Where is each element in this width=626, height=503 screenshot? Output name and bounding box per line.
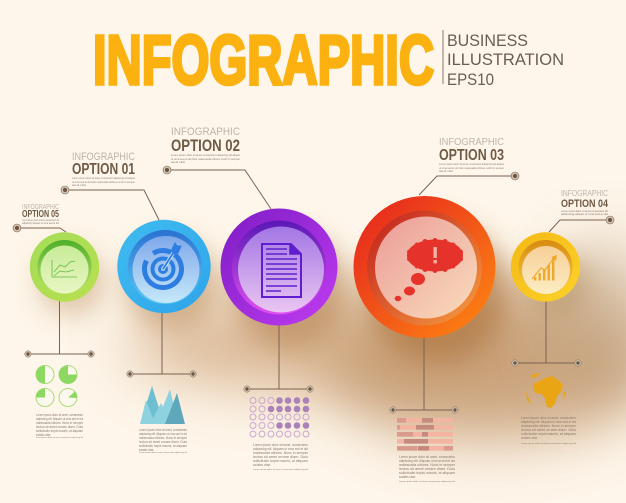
label: option 01: Lorem ipsum dolor sit amet consectetur adipiscing elit aliquet [72, 176, 135, 180]
text block: yellow: sollicitudin turpis mauris, at aliquam [521, 431, 577, 436]
text block: green: Lorem ipsum dolor sit amet, consectetur [36, 412, 83, 417]
text block: blue: lectus sit amet ornare diam. Duis [139, 439, 187, 444]
label: option 01: INFOGRAPHIC [72, 151, 135, 163]
text block: yellow: sodales vitae. [521, 435, 538, 440]
circle: green option 05 [30, 232, 99, 302]
text block: red: sollicitudin turpis mauris, at aliquam [399, 470, 456, 475]
label: option 03: Lorem ipsum dolor sit amet consectetur adipiscing elit aliquet [439, 162, 504, 166]
label: option 01 [72, 151, 135, 187]
text block: purple: lectus sit amet ornare diam. Duis [253, 454, 308, 459]
text block: purple: sollicitudin turpis mauris, at aliquam [253, 458, 309, 463]
text block: red: malesuada ultrices. Nunc in semper [399, 462, 456, 467]
label: option 03: INFOGRAPHIC [439, 137, 504, 148]
text block: yellow: Lorem ipsum dolor sit amet, consectetur [521, 415, 577, 420]
label: option 03: ut urna sed et dui felis malesuada ultrices morbi in semper [439, 166, 504, 170]
text block: green: adipiscing elit. Aliquam ut urna sed et dui [36, 416, 83, 421]
circle: yellow option 04 [511, 232, 580, 302]
icon: document [262, 244, 301, 297]
circle: blue option 01 [117, 220, 211, 313]
text block: blue: sollicitudin turpis mauris, at aliquam [139, 443, 188, 448]
label: option 02: INFOGRAPHIC [171, 126, 240, 138]
text block: yellow: Lorem ipsum dolor sit amet consectetur adipiscing elit [521, 442, 577, 445]
label: option 04: adipiscing aliquet ut urna sed et dui [561, 212, 608, 216]
title: INFOGRAPHIC [93, 21, 434, 99]
text block: blue [139, 427, 188, 454]
icon: line chart [52, 260, 77, 277]
text block: purple: adipiscing elit. Aliquam ut urna sed et dui [253, 446, 308, 451]
label: option 04: INFOGRAPHIC [561, 189, 608, 198]
subtitle: business illustration: ILLUSTRATION [447, 50, 564, 69]
label: option 03: OPTION 03 [439, 147, 504, 164]
icon: globe [526, 373, 566, 408]
label: option 04: Lorem ipsum dolor sit amet consectetur elit [561, 209, 608, 213]
cast shadows [38, 222, 626, 440]
text block: green: sodales vitae. [36, 432, 51, 437]
label: option 05 [22, 204, 59, 225]
icon: growth chart [532, 255, 557, 280]
text block: purple: Lorem ipsum dolor sit amet, consectetur [253, 442, 309, 447]
label: option 05: Lorem ipsum dolor sit amet consectetur elit [22, 218, 59, 222]
label: option 04 [561, 189, 609, 216]
text block: blue: malesuada ultrices. Nunc in semper [139, 435, 187, 440]
label: option 03: sed dui [439, 169, 453, 173]
text block: purple: malesuada ultrices. Nunc in semper [253, 450, 309, 455]
text block: yellow: adipiscing elit. Aliquam ut urna sed et dui [521, 419, 576, 424]
text block: green [36, 412, 83, 439]
label: option 01: ut urna sed et dui felis malesuada ultrices morbi in semper [72, 180, 135, 184]
connectors [17, 170, 610, 410]
subtitle: business illustration: BUSINESS [447, 31, 528, 50]
icon: thought bubble with exclamation [395, 238, 463, 301]
text block: green: lectus sit amet ornare diam. Duis [36, 424, 83, 429]
label: option 02: sed dui [171, 160, 185, 164]
text block: blue: sodales vitae. [139, 447, 154, 452]
connector end dots [13, 166, 614, 413]
text block: red: lectus sit amet ornare diam. Duis [399, 466, 455, 471]
text block: green: malesuada ultrices. Nunc in semper [36, 420, 83, 425]
text block: purple [253, 442, 309, 471]
label: option 05: adipiscing aliquet ut urna sed et dui [22, 221, 59, 225]
text block: blue: adipiscing elit. Aliquam ut urna sed et dui [139, 431, 187, 436]
text block: red: Lorem ipsum dolor sit amet, consectetur [399, 454, 456, 459]
label: option 05: OPTION 05 [22, 209, 59, 220]
icon: target with dart [138, 243, 188, 294]
circle: red option 03 [354, 196, 496, 338]
label: option 02 [171, 126, 240, 164]
text block: purple: sodales vitae. [253, 462, 271, 467]
subtitle: business illustration: EPS10 [447, 70, 494, 89]
label: option 05: INFOGRAPHIC [22, 204, 59, 211]
text block: purple: Lorem ipsum dolor sit amet consectetur adipiscing elit [253, 468, 309, 471]
label: option 03 [439, 137, 504, 173]
label: option 02: OPTION 02 [171, 136, 240, 155]
text block: green: Lorem ipsum dolor sit amet consectetur adipiscing elit [36, 436, 83, 439]
text block: red: sodales vitae. [399, 474, 416, 479]
text block: blue: Lorem ipsum dolor sit amet consectetur adipiscing elit [139, 451, 187, 454]
label: option 01: OPTION 01 [72, 161, 135, 178]
text block: red [399, 454, 456, 483]
pie charts [36, 366, 77, 406]
label: option 01: sed dui [72, 183, 86, 187]
text block: yellow: malesuada ultrices. Nunc in semper [521, 423, 577, 428]
subtitle: business illustration [443, 30, 564, 89]
text block: green: sollicitudin turpis mauris, at aliquam [36, 428, 83, 433]
dot matrix [250, 397, 309, 437]
label: option 02: ut urna sed et dui felis malesuada ultrices morbi in semper [171, 157, 240, 161]
text block: yellow [521, 415, 577, 445]
text block: red: Lorem ipsum dolor sit amet consectetur adipiscing elit [399, 480, 456, 483]
striped bars [397, 418, 453, 451]
text block: red: adipiscing elit. Aliquam ut urna sed et dui [399, 458, 455, 463]
text block: blue: Lorem ipsum dolor sit amet, consectetur [139, 427, 187, 432]
text block: yellow: lectus sit amet ornare diam. Duis [521, 427, 576, 432]
label: option 04: OPTION 04 [561, 198, 609, 210]
circle: purple option 02 [220, 208, 338, 326]
label: option 02: Lorem ipsum dolor sit amet consectetur adipiscing elit aliquet [171, 153, 240, 157]
area chart: mountains [140, 386, 185, 424]
